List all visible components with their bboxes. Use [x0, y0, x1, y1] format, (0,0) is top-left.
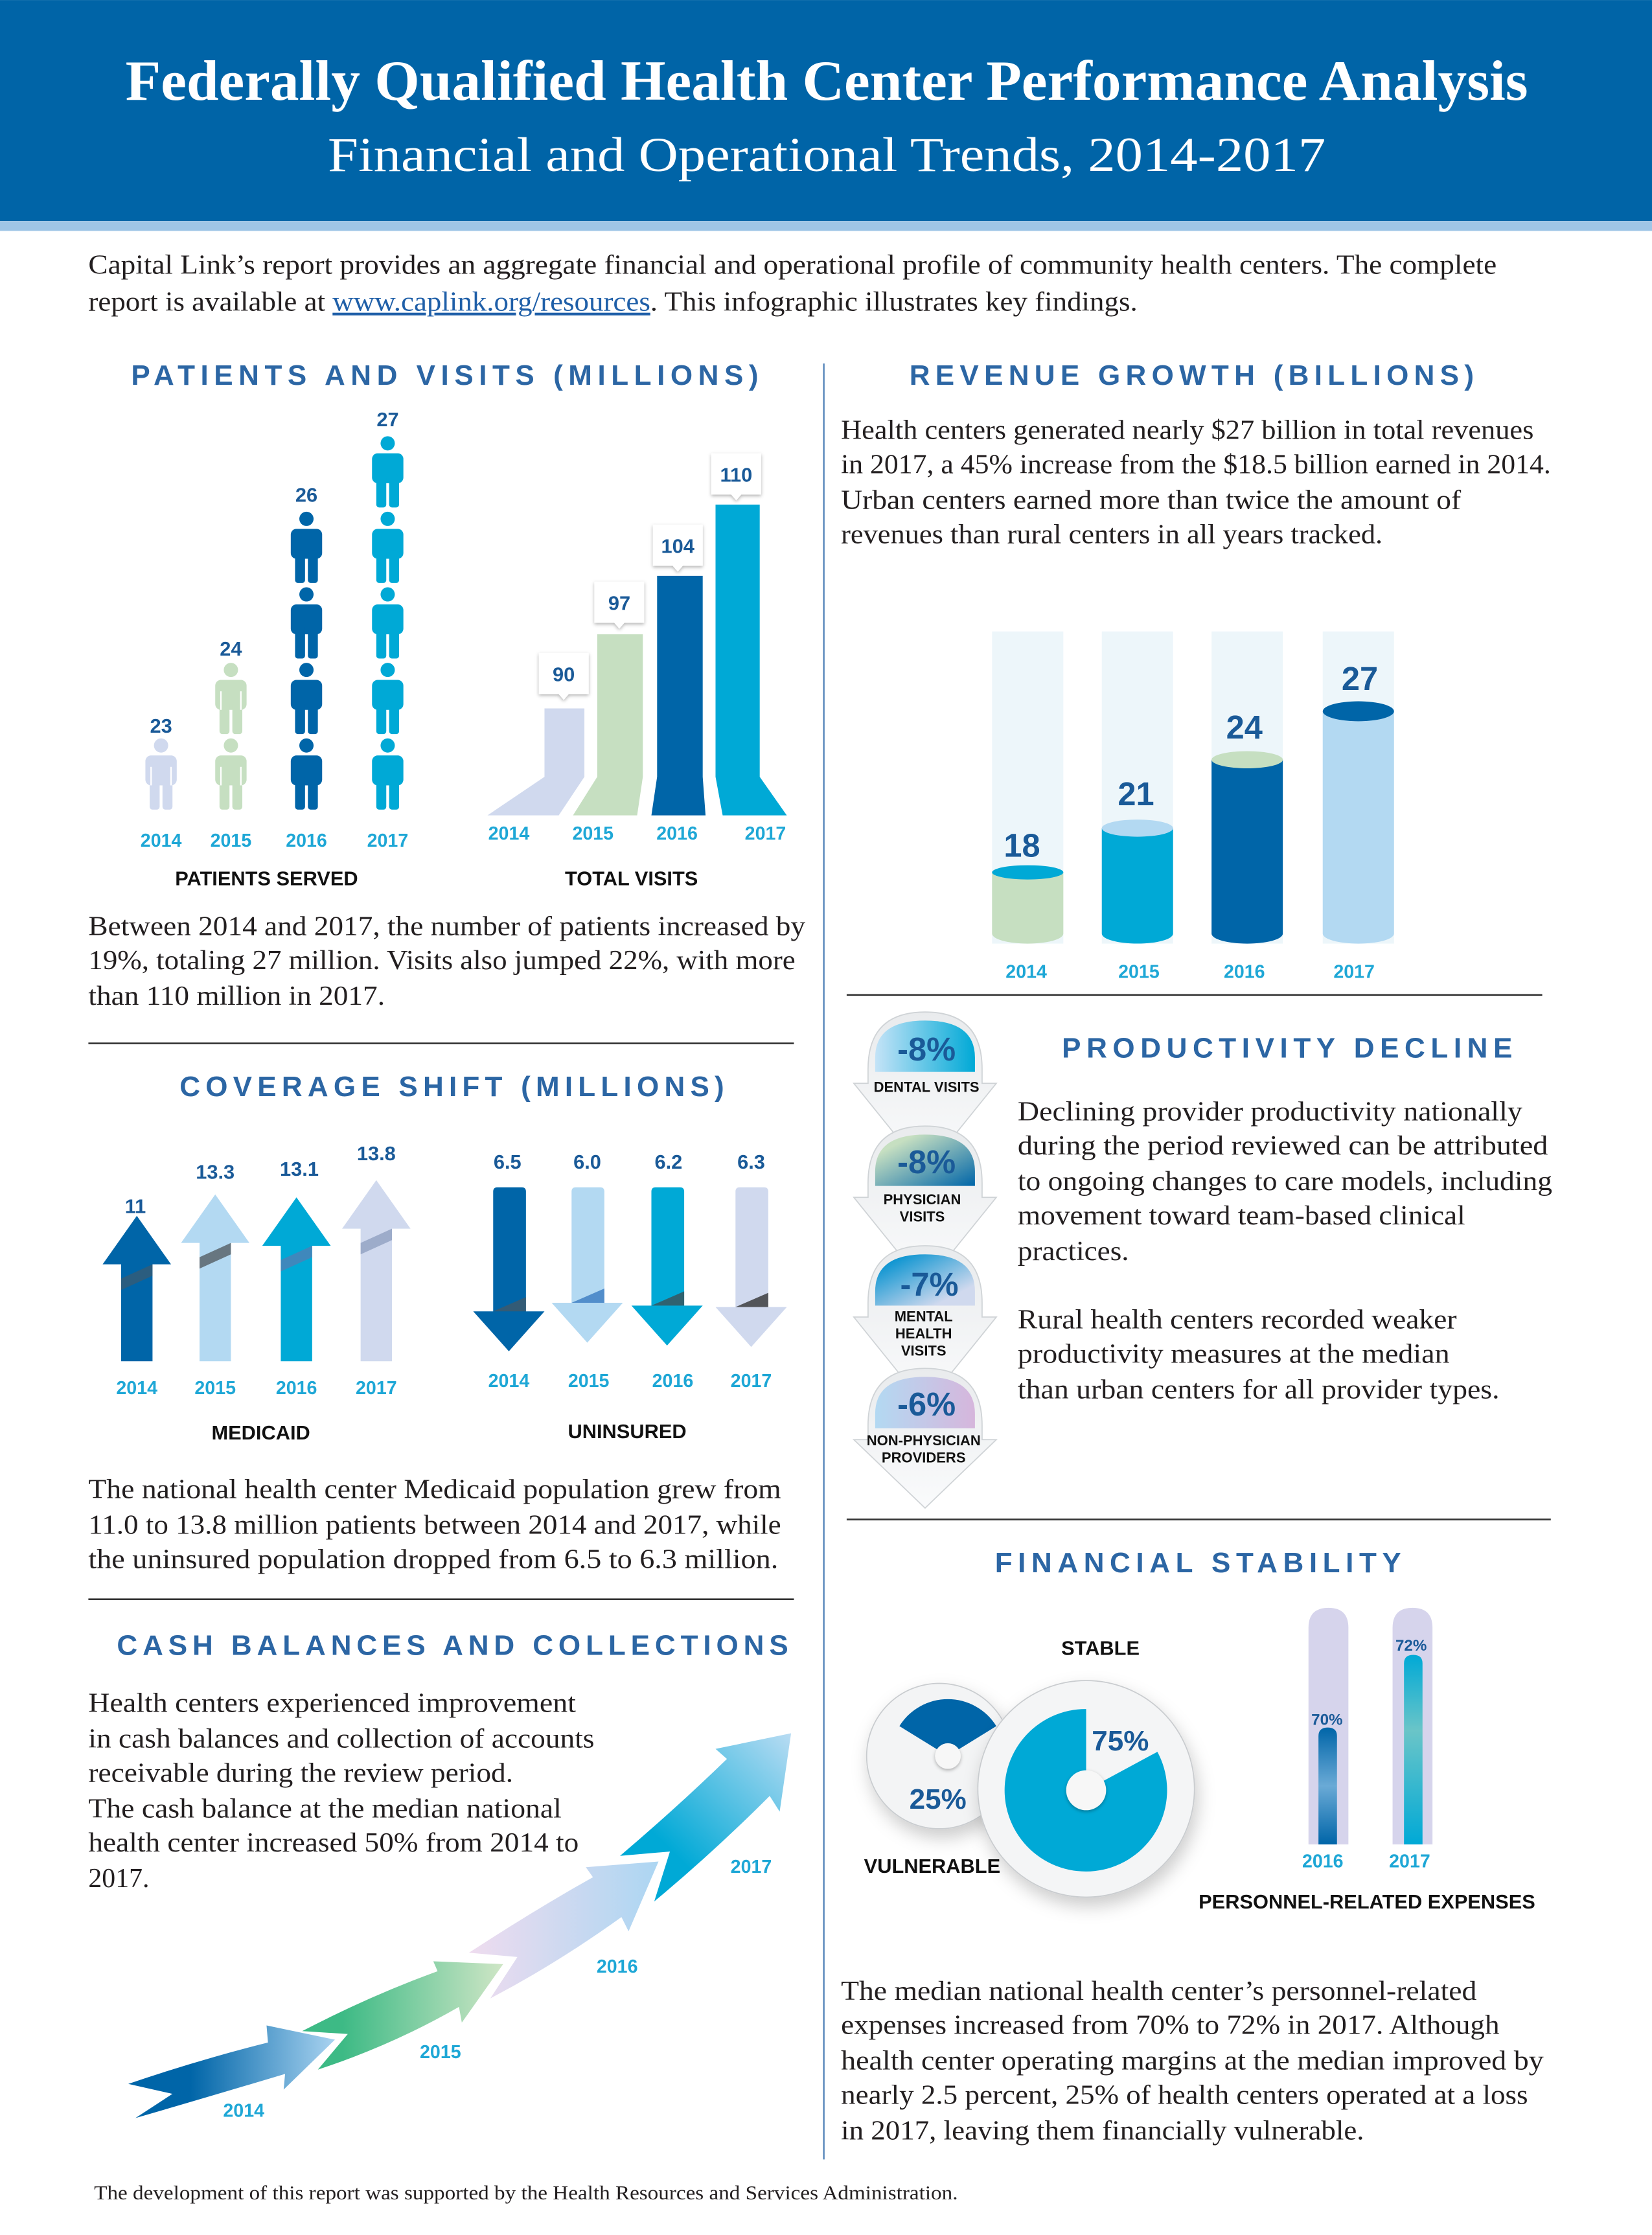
chart: stable pie: 75% [1092, 1725, 1149, 1757]
text: cash summary: in cash balances and collection of accounts [88, 1724, 594, 1754]
subtitle: Financial and Operational Trends, 2014-2017 [328, 128, 1325, 182]
chart: uninsured arrows: 6.2 [654, 1151, 682, 1173]
chart: medicaid arrows: 2015 [194, 1378, 236, 1399]
chart: revenue cylinders: 21 [1118, 775, 1154, 812]
chart: uninsured arrows: 6.0 [573, 1151, 601, 1173]
badges: productivity: HEALTH [895, 1325, 952, 1342]
text: financial summary: The median national health center’s personnel-related [841, 1977, 1476, 2006]
chart: patients served pictogram: 24 [220, 637, 242, 660]
chart: patients served pictogram: 23 [150, 715, 172, 737]
chart: total visits bars: 104 [661, 535, 694, 558]
chart: total visits bars: TOTAL VISITS [565, 867, 698, 889]
badges: productivity: -8% [897, 1031, 956, 1068]
chart: uninsured arrows: 6.5 [494, 1151, 522, 1173]
badges: productivity: PHYSICIAN [884, 1191, 961, 1208]
chart: uninsured arrows: UNINSURED [568, 1420, 687, 1443]
chart: uninsured arrows: 2015 [568, 1371, 610, 1392]
text: productivity explanation: Declining provider productivity nationally [1018, 1097, 1522, 1127]
chart: patients served pictogram: 2015 [211, 831, 251, 851]
chart: revenue cylinders: 2014 [1005, 961, 1047, 982]
text: coverage summary: 11.0 to 13.8 million patients between 2014 and 2017, while [88, 1510, 781, 1540]
chart: stable pie [978, 1636, 1195, 1897]
chart: revenue cylinders: 27 [1342, 660, 1378, 697]
chart: total visits bars: 90 [553, 663, 575, 686]
heading: coverage shift: COVERAGE SHIFT (MILLIONS) [179, 1071, 724, 1103]
chart: total visits bars: 2016 [656, 823, 698, 844]
heading: cash balances: CASH BALANCES AND COLLECTIONS [117, 1629, 788, 1661]
text: financial summary: health center operating margins at the median improved by [841, 2046, 1544, 2076]
text: cash summary: Health centers experienced improvement [88, 1688, 576, 1718]
panel: financial stability [841, 1547, 1544, 2146]
title: Federally Qualified Health Center Performance Analysis [126, 50, 1528, 113]
chart: revenue cylinders: 2016 [1224, 961, 1265, 982]
text: productivity explanation [1018, 1097, 1552, 1404]
chart: medicaid arrows: MEDICAID [211, 1421, 310, 1444]
text: patients summary [88, 911, 805, 1011]
panel: coverage shift [88, 1071, 786, 1574]
chart: medicaid arrows [102, 1142, 411, 1444]
chart: patients served pictogram: 2016 [286, 831, 327, 851]
panel: productivity decline [854, 1012, 1552, 1508]
heading: patients and visits: PATIENTS AND VISITS (MILLIONS) [131, 360, 758, 391]
text: revenue summary: in 2017, a 45% increase from the $18.5 billion earned in 2014. [841, 450, 1551, 480]
text: productivity explanation: to ongoing changes to care models, including [1018, 1167, 1552, 1197]
text: productivity explanation: than urban centers for all provider types. [1018, 1375, 1500, 1404]
text: productivity explanation: practices. [1018, 1237, 1129, 1266]
chart: revenue cylinders: 24 [1226, 709, 1263, 746]
chart: revenue cylinders [992, 632, 1394, 982]
chart: patients served pictogram: PATIENTS SERVED [175, 867, 358, 889]
text: coverage summary: the uninsured population dropped from 6.5 to 6.3 million. [88, 1544, 778, 1574]
text: patients summary: Between 2014 and 2017, the number of patients increased by [88, 911, 805, 941]
chart: medicaid arrows: 13.1 [280, 1158, 319, 1180]
chart: patients served pictogram: 26 [295, 484, 317, 507]
text: revenue summary: Health centers generated nearly $27 billion in total revenues [841, 416, 1533, 446]
panel: patients and visits [88, 360, 805, 1011]
heading: revenue growth: REVENUE GROWTH (BILLIONS) [910, 360, 1474, 391]
chart: personnel expense tubes [1199, 1608, 1535, 1913]
chart: personnel expense tubes: PERSONNEL-RELATED EXPENSES [1199, 1890, 1535, 1913]
chart: revenue cylinders: 18 [1004, 827, 1040, 864]
text: productivity explanation: during the period reviewed can be attributed [1018, 1131, 1548, 1161]
chart: personnel expense tubes: 2017 [1389, 1851, 1430, 1872]
chart: total visits bars: 97 [608, 592, 630, 615]
badges: productivity: VISITS [900, 1209, 945, 1225]
panel: cash balances [88, 1629, 791, 2121]
text: coverage summary [88, 1474, 781, 1574]
chart: medicaid arrows: 11 [125, 1195, 146, 1217]
badges: productivity: DENTAL VISITS [874, 1079, 980, 1095]
badges: productivity: -7% [901, 1266, 959, 1303]
text: productivity explanation: Rural health centers recorded weaker [1018, 1305, 1457, 1335]
text: cash summary: receivable during the review period. [88, 1758, 513, 1788]
text: cash summary [88, 1688, 594, 1894]
chart: medicaid arrows: 2014 [116, 1378, 157, 1399]
text: cash summary: health center increased 50% from 2014 to [88, 1828, 579, 1858]
chart: uninsured arrows: 6.3 [737, 1151, 765, 1173]
text: revenue summary [841, 416, 1551, 549]
chart: medicaid arrows: 13.8 [357, 1142, 396, 1165]
chart: total visits bars: 2015 [572, 823, 614, 844]
chart: total visits bars [487, 453, 786, 889]
heading: productivity decline: PRODUCTIVITY DECLINE [1062, 1033, 1512, 1064]
chart: patients served pictogram: 27 [376, 408, 399, 431]
badges: productivity: PROVIDERS [882, 1449, 966, 1465]
badges: productivity: MENTAL [895, 1309, 953, 1325]
chart: stable pie: STABLE [1061, 1636, 1140, 1659]
panel: revenue growth [841, 360, 1551, 982]
chart: rising arrows [128, 1733, 791, 2121]
chart: personnel expense tubes: 2016 [1302, 1851, 1344, 1872]
footer note: The development of this report was supported by the Health Resources and Services Administration. [94, 2182, 958, 2204]
text: cash summary: 2017. [88, 1864, 149, 1894]
text: revenue summary: Urban centers earned more than twice the amount of [841, 486, 1461, 516]
text: financial summary: in 2017, leaving them financially vulnerable. [841, 2116, 1364, 2146]
text: financial summary [841, 1977, 1544, 2146]
chart: medicaid arrows: 13.3 [196, 1161, 235, 1184]
chart: personnel expense tubes: 70% [1311, 1711, 1343, 1728]
chart: medicaid arrows: 2016 [276, 1378, 317, 1399]
heading: financial stability: FINANCIAL STABILITY [995, 1547, 1401, 1579]
chart: uninsured arrows: 2014 [488, 1371, 529, 1392]
intro text: report is available at www.caplink.org/resources . This infographic illustrates key findings. [88, 288, 1138, 317]
badges: productivity: VISITS [901, 1342, 946, 1358]
chart: medicaid arrows: 2017 [356, 1378, 397, 1399]
chart: vulnerable pie [864, 1683, 1012, 1877]
intro text [88, 250, 1497, 317]
header banner [0, 0, 1652, 231]
intro text: Capital Link’s report provides an aggregate financial and operational profile of community health centers. The complete [88, 250, 1497, 280]
chart: personnel expense tubes: 72% [1395, 1637, 1427, 1655]
chart: rising arrows: 2017 [731, 1857, 772, 1877]
chart: uninsured arrows: 2017 [731, 1371, 772, 1392]
chart: uninsured arrows [473, 1151, 786, 1443]
text: coverage summary: The national health center Medicaid population grew from [88, 1474, 781, 1504]
chart: rising arrows: 2015 [420, 2042, 461, 2063]
chart: total visits bars: 2014 [488, 823, 529, 844]
chart: vulnerable pie: 25% [910, 1783, 967, 1815]
chart: total visits bars: 110 [720, 464, 752, 487]
chart: rising arrows: 2016 [597, 1956, 637, 1977]
text: patients summary: than 110 million in 2017. [88, 981, 385, 1011]
chart: patients served pictogram [141, 408, 408, 889]
chart: patients served pictogram: 2014 [141, 831, 182, 851]
badges: productivity: -8% [897, 1143, 956, 1180]
text: financial summary: expenses increased from 70% to 72% in 2017. Although [841, 2011, 1500, 2041]
badges: productivity: -6% [897, 1386, 956, 1423]
chart: total visits bars: 2017 [745, 823, 786, 844]
chart: uninsured arrows: 2016 [652, 1371, 693, 1392]
text: patients summary: 19%, totaling 27 million. Visits also jumped 22%, with more [88, 946, 796, 976]
text: productivity explanation: productivity measures at the median [1018, 1339, 1450, 1369]
text: productivity explanation: movement toward team-based clinical [1018, 1201, 1465, 1231]
chart: rising arrows: 2014 [223, 2100, 264, 2121]
chart: revenue cylinders: 2015 [1118, 961, 1160, 982]
badges: productivity: NON-PHYSICIAN [867, 1432, 981, 1449]
chart: vulnerable pie: VULNERABLE [864, 1855, 1000, 1877]
chart: revenue cylinders: 2017 [1333, 961, 1375, 982]
text: cash summary: The cash balance at the median national [88, 1794, 562, 1824]
text: revenue summary: revenues than rural centers in all years tracked. [841, 520, 1382, 549]
badges: productivity [854, 1012, 996, 1508]
text: financial summary: nearly 2.5 percent, 25% of health centers operated at a loss [841, 2081, 1528, 2111]
chart: patients served pictogram: 2017 [367, 831, 408, 851]
